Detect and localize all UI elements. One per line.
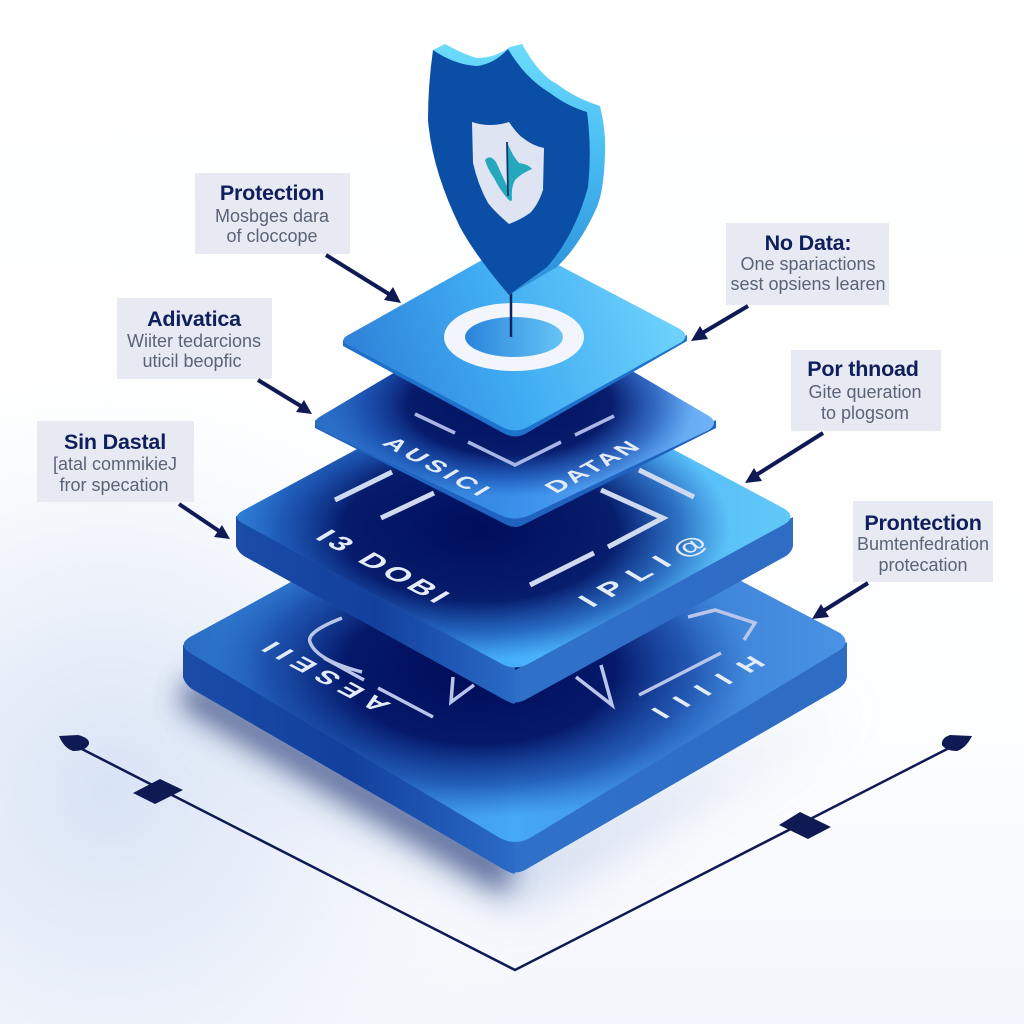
callout: Protection: Protection	[220, 181, 324, 205]
callout: Adivatica: Adivatica	[147, 307, 242, 331]
callout: Por thnoad	[791, 350, 941, 431]
callout: Protection: Mosbges dara	[215, 206, 330, 226]
callout: Prontection: Prontection	[864, 511, 982, 535]
shield side	[433, 44, 605, 295]
layer 2	[315, 306, 716, 527]
callout: Prontection	[853, 501, 993, 582]
arrow: Sin Dastal	[179, 504, 230, 539]
plate text: left: AUSICI	[376, 434, 495, 500]
ground shadow	[170, 675, 860, 905]
plate text: left: AESEII	[254, 638, 397, 716]
shield face	[428, 49, 590, 295]
ring	[444, 303, 584, 371]
callout: Por thnoad: Gite queration	[808, 382, 922, 402]
callout: Sin Dastal: fror specation	[59, 475, 169, 495]
layer 4: base plate	[183, 465, 847, 874]
arrow: Adivatica	[258, 380, 312, 414]
plate text: right: DATAN	[539, 438, 646, 497]
arrow: Protection	[326, 255, 401, 303]
check mark	[485, 142, 532, 201]
plate line art	[310, 610, 755, 717]
callout: Protection: of cloccope	[226, 226, 318, 246]
icon: right pin	[942, 735, 972, 751]
callout: Adivatica	[117, 298, 272, 379]
icon: left pin	[59, 735, 89, 751]
callout: No Data: sest opsiens learen	[730, 274, 886, 294]
arrow: No Data	[691, 306, 748, 341]
plate line art	[335, 470, 694, 585]
callout: Adivatica: Wiiter tedarcions	[127, 331, 261, 351]
callout: Por thnoad: Por thnoad	[807, 357, 919, 381]
callout: No Data	[726, 223, 889, 305]
icon: shield	[428, 44, 605, 337]
callout: Adivatica: uticil beopfic	[142, 351, 242, 371]
callout: Sin Dastal: Sin Dastal	[64, 430, 166, 454]
layer 1: top plate	[343, 246, 687, 436]
callout: Prontection: protecation	[878, 555, 968, 575]
callout: Sin Dastal	[37, 421, 194, 502]
plate text: right: HIIII	[645, 652, 772, 723]
plate text: left: I3 DOBI	[308, 526, 456, 607]
icon: left diamond marker	[133, 779, 183, 804]
callout: Prontection: Bumtenfedration	[857, 534, 989, 554]
ground frame lines	[59, 735, 972, 970]
callout: Sin Dastal: [atal commikieJ	[53, 454, 177, 474]
arrow: Prontection	[812, 583, 868, 619]
plate line art	[415, 414, 614, 465]
callout: No Data: No Data:	[765, 231, 851, 255]
arrow: Por thnoad	[745, 433, 823, 483]
icon: right diamond marker	[779, 812, 831, 839]
layer 3	[236, 368, 793, 704]
callout: Protection	[195, 173, 350, 254]
plate text: right: IPLI@	[572, 532, 716, 611]
callout: No Data: One spariactions	[740, 254, 876, 274]
inner shield	[472, 122, 544, 224]
callout: Por thnoad: to plogsom	[821, 403, 909, 423]
